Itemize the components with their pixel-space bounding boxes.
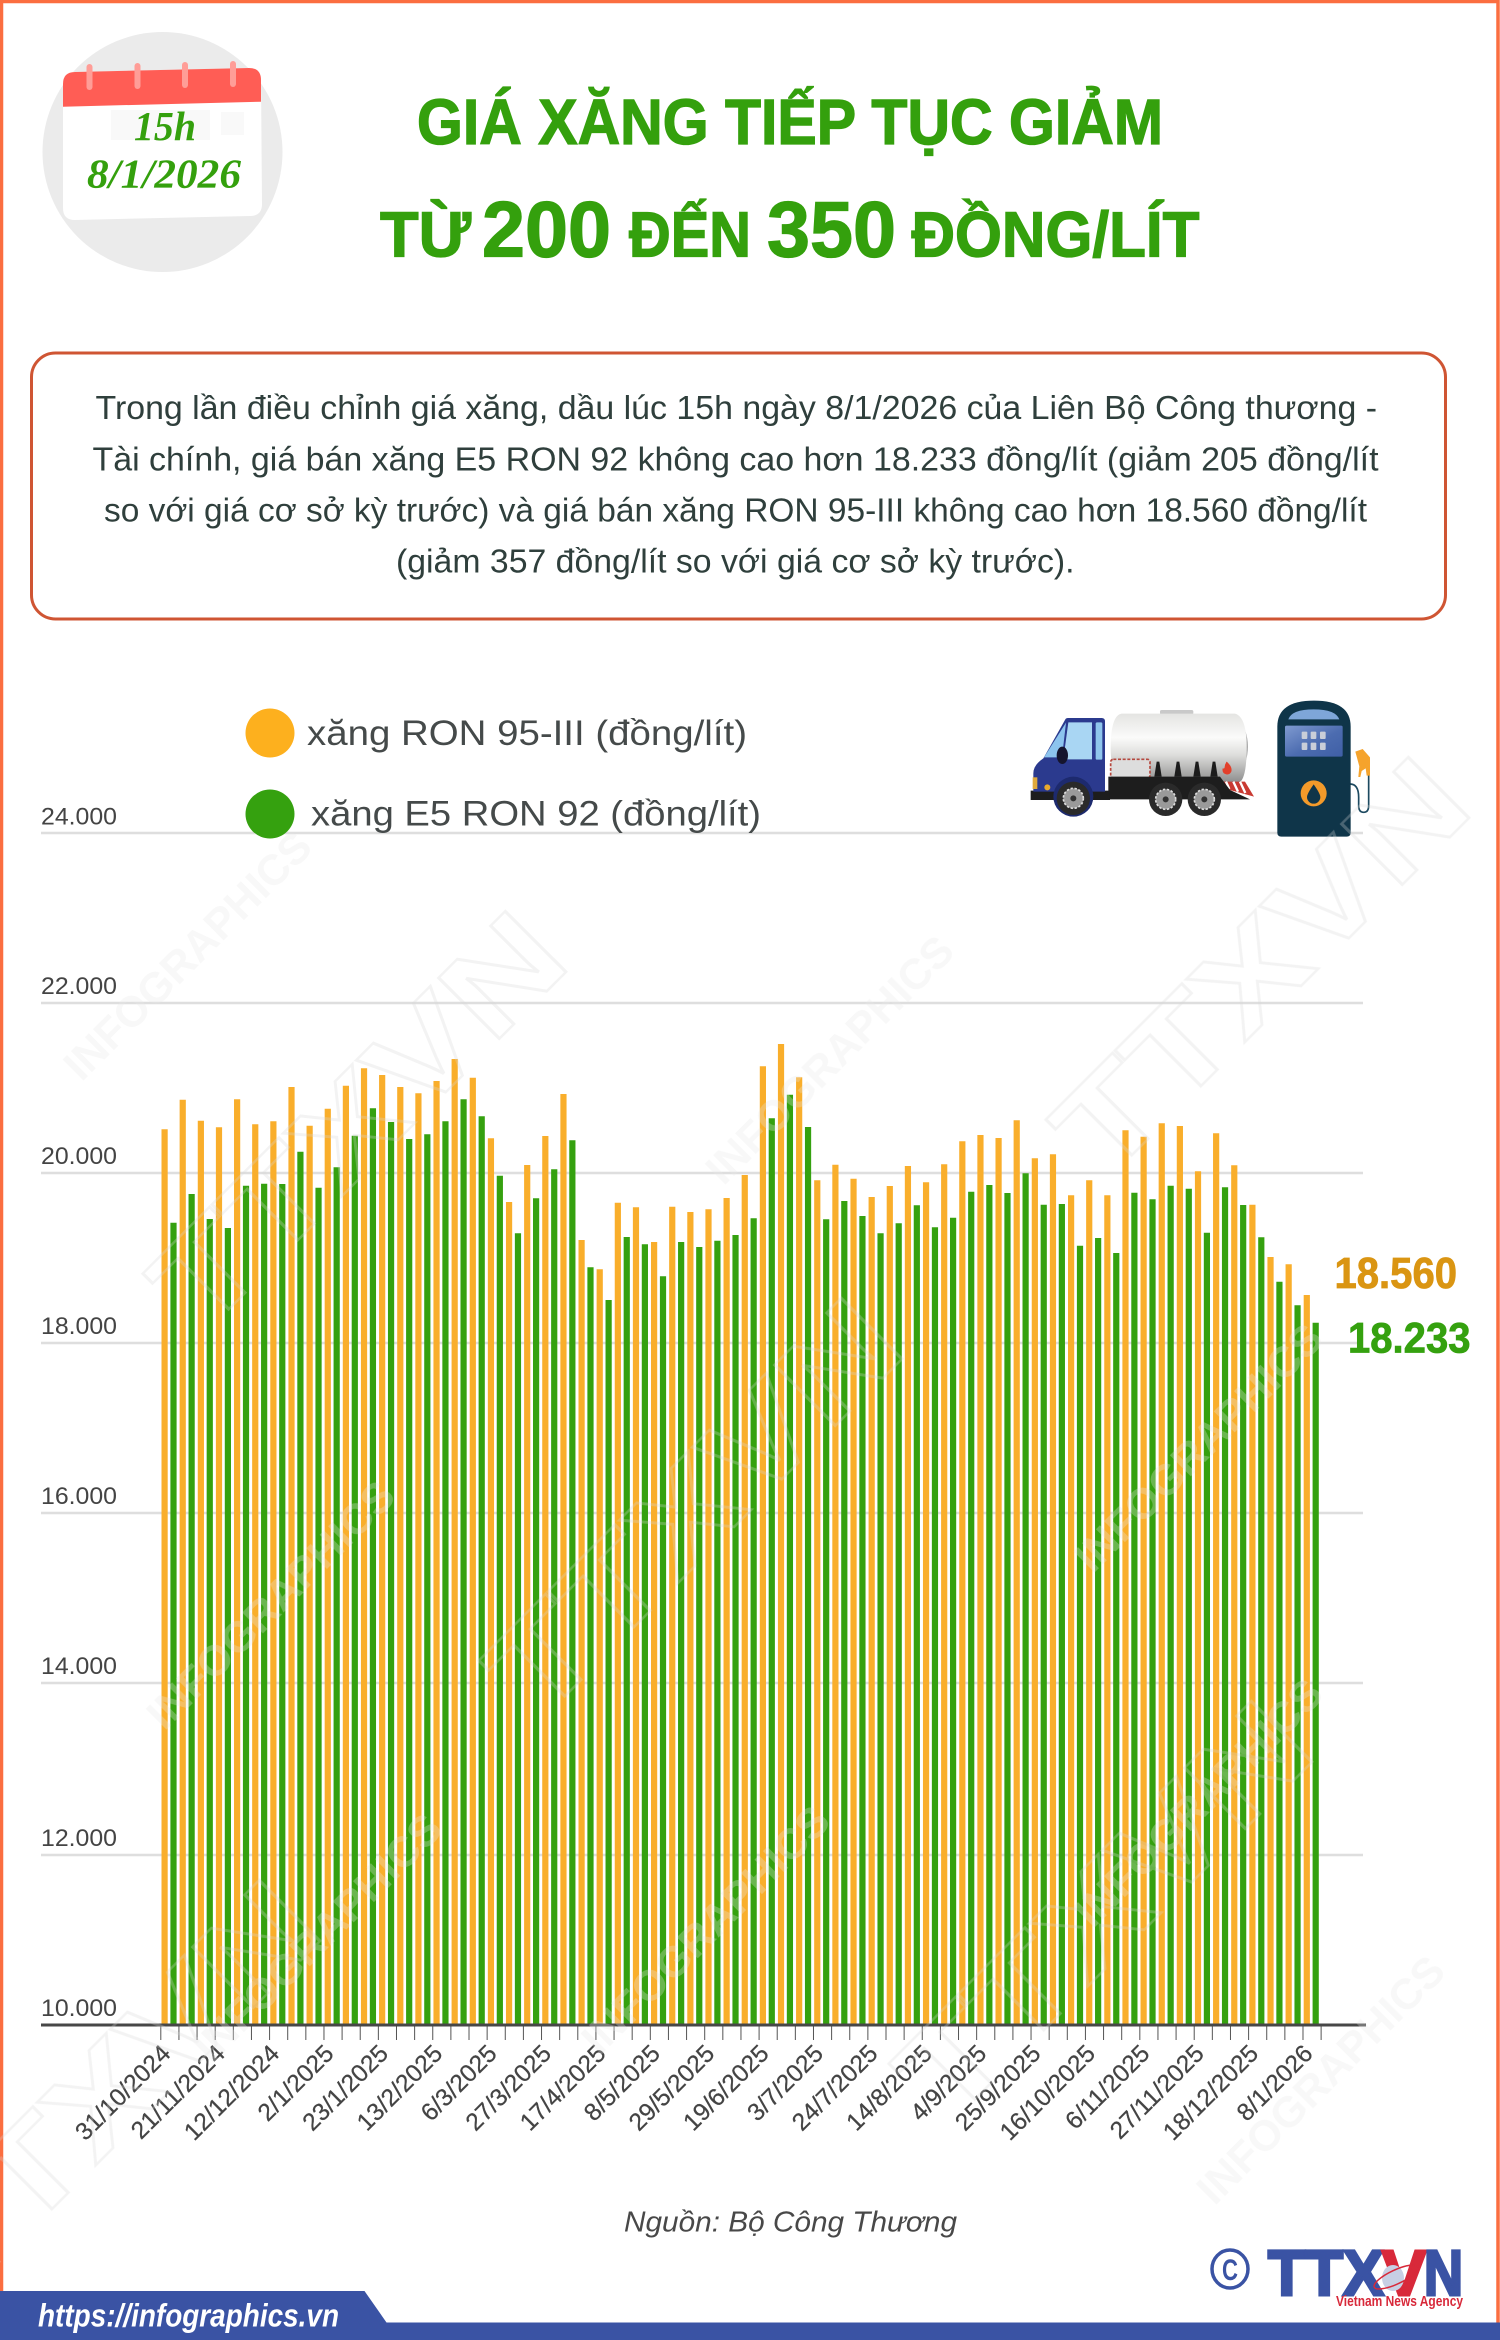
value label: E5 RON 92: 18.233 — [1348, 1314, 1470, 1362]
x axis date labels: 19/6/2025 — [678, 2040, 775, 2136]
x axis date labels: 6/11/2025 — [1060, 2040, 1155, 2135]
value label: RON 95-III: 18.560 — [1334, 1249, 1457, 1298]
calendar date: 8/1/2026 — [87, 150, 242, 196]
panel: summary text — [32, 353, 1446, 619]
x axis date labels: 27/3/2025 — [461, 2040, 557, 2136]
y axis labels: 16.000 — [41, 1483, 117, 1510]
x axis date labels: 24/7/2025 — [787, 2040, 883, 2136]
source: Nguồn: Bộ Công Thương — [624, 2206, 957, 2238]
x axis date labels: 8/1/2026 — [1232, 2040, 1318, 2127]
logo letters: TTX — [1268, 2237, 1384, 2309]
x axis date labels: 4/9/2025 — [906, 2040, 992, 2127]
footer url: https://infographics.vn — [38, 2298, 339, 2334]
x axis date labels: 29/5/2025 — [624, 2040, 720, 2136]
x axis date labels: 16/10/2025 — [995, 2040, 1101, 2146]
bars: RON 95-III — [162, 1044, 1310, 2025]
watermarks: TTXVN — [459, 1272, 929, 1742]
logo: TTXVN — [1212, 2237, 1464, 2310]
icon: tanker truck — [1031, 710, 1254, 817]
icon: fuel pump — [1277, 701, 1370, 837]
y axis labels: 12.000 — [41, 1825, 117, 1852]
watermarks — [0, 731, 1496, 2324]
y axis labels: 22.000 — [41, 973, 117, 1000]
logo letters: V — [1382, 2237, 1426, 2309]
x axis date labels: 13/2/2025 — [352, 2040, 448, 2136]
y axis labels — [41, 804, 117, 2022]
x axis date labels: 14/8/2025 — [842, 2040, 938, 2136]
x axis date labels: 27/11/2025 — [1105, 2040, 1210, 2145]
logo letters: N — [1424, 2237, 1463, 2309]
summary paragraph: Trong lần điều chỉnh giá xăng, dầu lúc 15h ngày 8/1/2026 của Liên Bộ Công thương - — [96, 390, 1377, 427]
summary paragraph: so với giá cơ sở kỳ trước) và giá bán xăng RON 95-III không cao hơn 18.560 đồng/lít — [104, 492, 1368, 530]
watermarks: INFOGRAPHICS — [697, 927, 964, 1194]
watermarks: INFOGRAPHICS — [1066, 1670, 1333, 1937]
title line 2: ĐẾN — [629, 198, 751, 270]
y axis labels: 10.000 — [41, 1995, 117, 2022]
watermarks: TTXVN — [869, 1675, 1339, 2145]
calendar sheet — [63, 68, 262, 220]
x axis date labels: 8/5/2025 — [579, 2040, 666, 2127]
x axis date labels: 17/4/2025 — [515, 2040, 611, 2136]
title — [380, 85, 1200, 274]
x axis date labels: 18/12/2025 — [1158, 2040, 1264, 2146]
calendar header — [63, 68, 261, 107]
summary paragraph — [92, 390, 1379, 580]
summary paragraph: Tài chính, giá bán xăng E5 RON 92 không cao hơn 18.233 đồng/lít (giảm 205 đồng/lít — [92, 442, 1379, 478]
calendar time: 15h — [134, 103, 196, 149]
title line 2 — [380, 184, 1200, 274]
x axis date labels: 3/7/2025 — [742, 2040, 829, 2127]
title line 2: 350 — [767, 184, 896, 274]
watermarks: INFOGRAPHICS — [573, 1797, 840, 2064]
calendar rings — [86, 61, 236, 90]
summary paragraph: (giảm 357 đồng/lít so với giá cơ sở kỳ trước). — [396, 544, 1074, 580]
bar chart — [41, 804, 1470, 2146]
legend label: E5 RON 92: xăng E5 RON 92 (đồng/lít) — [311, 794, 761, 834]
watermarks: INFOGRAPHICS — [138, 1472, 405, 1739]
legend — [246, 708, 761, 838]
watermarks: INFOGRAPHICS — [1188, 1947, 1455, 2214]
watermarks: INFOGRAPHICS — [1066, 1315, 1333, 1582]
x axis — [41, 2025, 1366, 2033]
y axis labels: 20.000 — [41, 1143, 117, 1170]
watermarks: TTXVN — [1026, 731, 1496, 1201]
watermarks: TTXVN — [123, 885, 593, 1355]
agency name: Vietnam News Agency — [1336, 2293, 1464, 2310]
copyright mark — [1212, 2250, 1248, 2288]
bars: E5 RON 92 — [170, 1095, 1319, 2025]
legend swatch: RON 95-III — [246, 708, 294, 758]
y axis labels: 18.000 — [41, 1313, 117, 1340]
x axis date labels: 25/9/2025 — [950, 2040, 1046, 2136]
title line 2: ĐỒNG/LÍT — [912, 198, 1200, 270]
x axis date labels: 21/11/2024 — [126, 2040, 231, 2145]
legend label: RON 95-III: xăng RON 95-III (đồng/lít) — [307, 714, 747, 753]
gridlines — [41, 833, 1363, 1855]
logo globe — [1371, 2261, 1421, 2293]
watermarks: INFOGRAPHICS — [55, 823, 322, 1090]
x axis date labels: 12/12/2024 — [179, 2040, 285, 2146]
title line 2: 200 — [482, 184, 611, 274]
calendar badge — [42, 32, 282, 272]
x axis date labels — [70, 2040, 1318, 2146]
x axis date labels: 2/1/2025 — [253, 2040, 339, 2127]
legend swatch: E5 RON 92 — [246, 790, 294, 838]
logo letters — [1268, 2237, 1463, 2309]
title line 1: GIÁ XĂNG TIẾP TỤC GIẢM — [417, 85, 1163, 158]
x axis date labels: 6/3/2025 — [416, 2040, 503, 2127]
watermarks: INFOGRAPHICS — [185, 1805, 452, 2072]
y axis labels: 14.000 — [41, 1653, 117, 1680]
copyright mark: C — [1222, 2254, 1238, 2287]
x axis date labels: 23/1/2025 — [298, 2040, 394, 2136]
footer bar — [0, 2291, 1500, 2340]
title line 2: TỪ — [380, 198, 472, 270]
x axis date labels: 31/10/2024 — [70, 2040, 176, 2146]
y axis labels: 24.000 — [41, 804, 117, 830]
